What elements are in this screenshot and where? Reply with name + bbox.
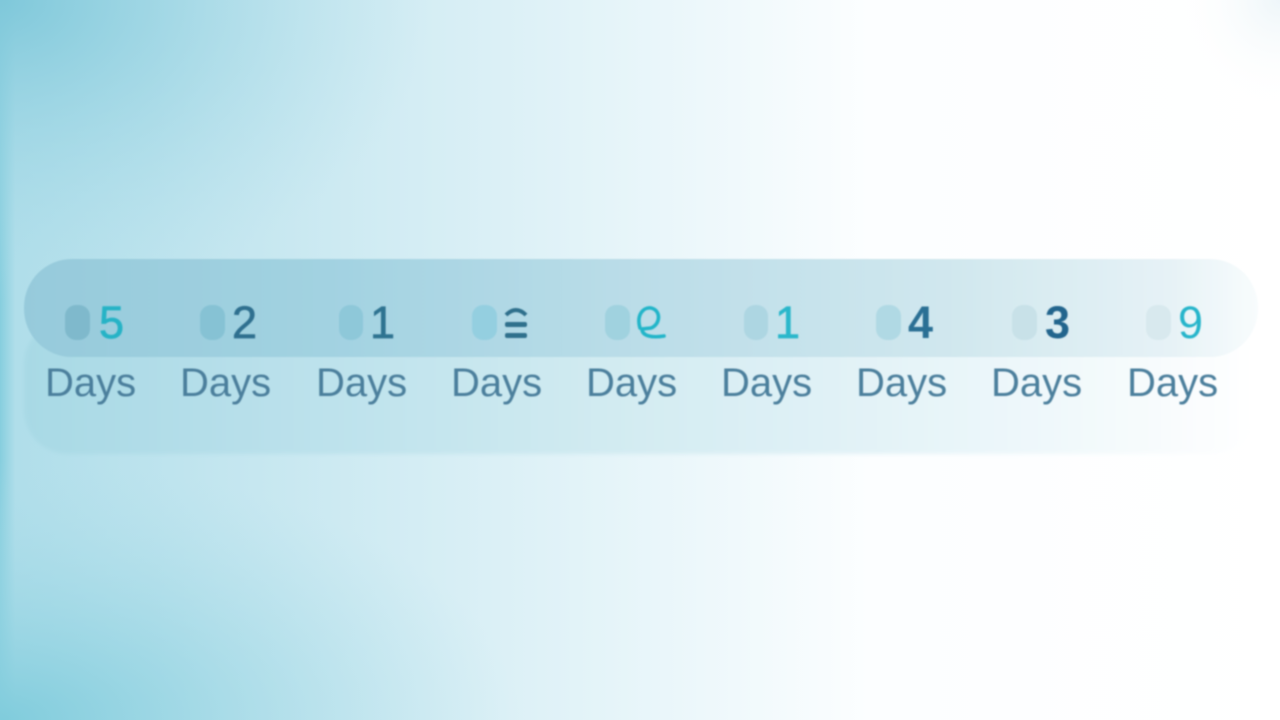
counter: 2 days xyxy=(180,297,271,405)
counter: 1 day xyxy=(316,297,407,405)
counter: 3 days xyxy=(991,297,1082,405)
counter: 3 days: 3 xyxy=(1045,297,1070,348)
counter: 1 day: Days xyxy=(316,361,407,405)
counter: garbled 2: Days xyxy=(586,361,677,405)
counter: garbled 2 xyxy=(586,305,677,405)
counter: 9 days: Days xyxy=(1127,361,1218,405)
counter: 5 days xyxy=(45,297,136,405)
counter: 2 days: Days xyxy=(180,361,271,405)
counter: 1 day teal: Days xyxy=(721,361,812,405)
counter: 4 days: 4 xyxy=(908,297,933,348)
counter: 4 days xyxy=(856,297,947,405)
counter: 3 days: Days xyxy=(991,361,1082,405)
counter: garbled 3: Days xyxy=(451,361,542,405)
counter: 5 days: Days xyxy=(45,361,136,405)
counter: garbled 3 xyxy=(451,305,542,405)
counter: 1 day teal: 1 xyxy=(775,297,800,348)
day counters xyxy=(45,297,1218,405)
counter: 1 day: 1 xyxy=(370,297,395,348)
panel: upper band xyxy=(24,259,1258,357)
counter: 1 day teal xyxy=(721,297,812,405)
counter: 4 days: Days xyxy=(856,361,947,405)
counter: 5 days: 5 xyxy=(99,297,124,348)
counter: 9 days: 9 xyxy=(1178,297,1203,348)
panel: lower band xyxy=(24,320,1258,454)
counter: 2 days: 2 xyxy=(232,297,257,348)
counter: 9 days xyxy=(1127,297,1218,405)
